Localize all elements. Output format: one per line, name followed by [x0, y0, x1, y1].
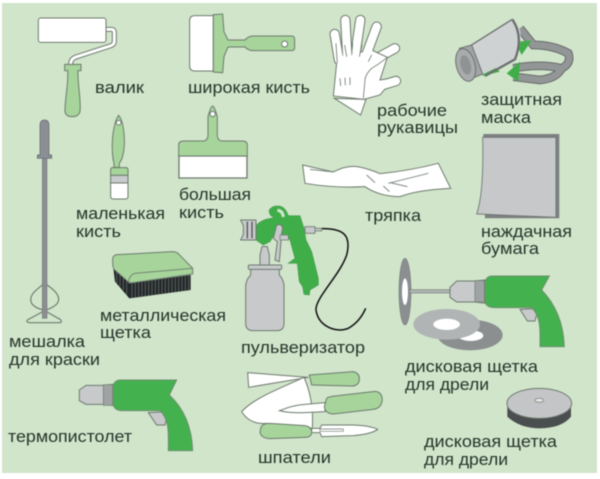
label: дисковая щетка для дрели (lower): для дрели: [424, 451, 508, 469]
jar: [246, 269, 284, 331]
label: металлическая щетка: [100, 307, 226, 342]
label: рабочие рукавицы: [377, 102, 458, 137]
label: дисковая щетка для дрели (upper): [405, 358, 539, 394]
hose: [316, 229, 366, 330]
label: металлическая щетка: щетка: [100, 324, 152, 342]
label: дисковая щетка для дрели (upper): для дрели: [405, 376, 489, 394]
label: маленькая кисть: [76, 205, 165, 241]
label: рабочие рукавицы: рукавицы: [377, 119, 458, 137]
icon: drill with disc brushes: [399, 258, 564, 350]
label: дисковая щетка для дрели (upper): дисковая щетка: [405, 358, 539, 376]
gun body: [256, 206, 318, 295]
label: наждачная бумага: [481, 223, 572, 258]
label: широкая кисть: широкая кисть: [188, 79, 310, 97]
icon: metal brush: [113, 252, 193, 298]
icon: sandpaper: [477, 134, 559, 218]
label: мешалка для краски: [9, 333, 100, 369]
label: мешалка для краски: мешалка: [9, 333, 86, 351]
icon: rag: [303, 163, 451, 197]
icon: protective mask: [452, 19, 569, 84]
icon: work gloves: [333, 20, 396, 115]
icon: paint mixer: [27, 120, 61, 323]
label: металлическая щетка: металлическая: [100, 307, 226, 325]
icon: disc brush for drill: [507, 388, 572, 428]
label: маленькая кисть: кисть: [76, 223, 121, 241]
label: валик: валик: [95, 79, 145, 97]
label: пульверизатор: пульверизатор: [241, 339, 365, 357]
label: наждачная бумага: наждачная: [481, 223, 572, 241]
label: большая кисть: кисть: [179, 204, 224, 222]
icon: small brush: [111, 115, 128, 199]
icon: wide brush: [190, 14, 295, 73]
label: большая кисть: большая: [179, 186, 251, 204]
label: наждачная бумага: бумага: [481, 240, 540, 258]
icon: large brush: [179, 106, 247, 178]
icon: heat gun: [79, 380, 193, 451]
icon: spray gun: [241, 206, 366, 331]
label: защитная маска: защитная: [481, 91, 562, 109]
label: рабочие рукавицы: рабочие: [377, 102, 447, 120]
label: защитная маска: [481, 91, 562, 127]
label: дисковая щетка для дрели (lower): дисковая щетка: [424, 433, 558, 451]
label: мешалка для краски: для краски: [9, 351, 100, 369]
label: защитная маска: маска: [481, 109, 532, 127]
label: шпатели: шпатели: [258, 449, 331, 467]
label: маленькая кисть: маленькая: [76, 205, 165, 223]
label: дисковая щетка для дрели (lower): [424, 433, 558, 469]
label: большая кисть: [179, 186, 251, 222]
label: тряпка: тряпка: [365, 207, 422, 225]
icon: paint roller: [38, 18, 114, 117]
icon: trowels: [242, 372, 382, 439]
label: термопистолет: термопистолет: [8, 428, 132, 446]
